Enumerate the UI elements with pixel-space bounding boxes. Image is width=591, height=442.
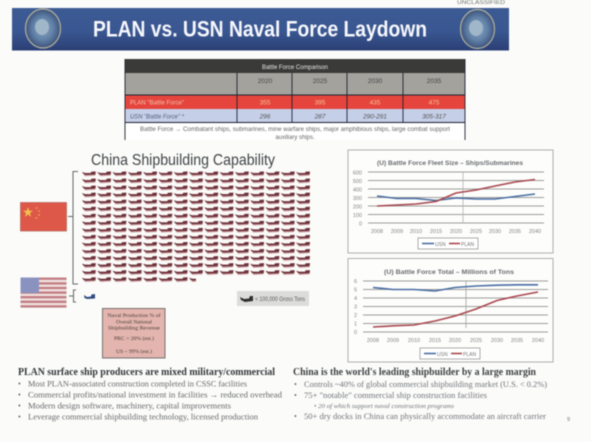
chart: battle force total tons: 2010 (408, 338, 420, 344)
text block: China leading shipbuilder: 75+ "notable" commercial ship construction facilities (304, 391, 487, 400)
chart: battle force fleet size: 500 (353, 179, 362, 185)
chart: battle force fleet size: 2035 (509, 229, 521, 235)
chart: battle force fleet size: 2025 (470, 229, 482, 235)
chart: battle force total tons: 6 (354, 279, 357, 285)
table row: USN: 290-291 (362, 114, 387, 120)
bracket: China ships (68, 172, 78, 284)
chart: battle force fleet size: 2020 (450, 229, 462, 235)
table row: USN (125, 109, 465, 122)
text block: China leading shipbuilder: • 20 of which support naval construction programs (314, 403, 454, 410)
line: USN tons (373, 285, 538, 291)
icon: left seal (26, 9, 60, 48)
table row: PLAN: 355 (260, 100, 271, 106)
table row: PLAN: PLAN "Battle Force" (130, 100, 184, 106)
table row: PLAN (125, 95, 465, 109)
table years row: 2025 (313, 78, 328, 85)
text block: PLAN producers: • (18, 380, 21, 388)
callout: naval production share: PRC = 20% (est.) (114, 335, 154, 342)
chart: battle force fleet size: 2009 (391, 229, 403, 235)
text block: China leading shipbuilder (293, 367, 547, 421)
table footnote (140, 127, 450, 141)
table: battle force comparison (125, 59, 465, 141)
text block: China leading shipbuilder: 50+ dry docks in China can physically accommodate an aircraft carrier (304, 412, 546, 421)
table years row: 2030 (368, 78, 383, 85)
callout: naval production share: Naval Production % of (108, 312, 161, 319)
text block: PLAN producers: Commercial profits/national investment in facilities → reduced overhead (28, 390, 282, 400)
line: USN ships (377, 194, 535, 200)
chart: battle force total tons: 2040 (532, 338, 544, 344)
chart: battle force fleet size: 2010 (410, 229, 422, 235)
line: PLAN tons (373, 292, 538, 327)
table row: USN: 287 (314, 114, 326, 120)
legend: ship tonnage: = 100,000 Gross Tons (255, 297, 305, 303)
table row: PLAN: 475 (429, 100, 440, 106)
flag: China (20, 202, 66, 231)
chart: battle force fleet size: 200 (353, 204, 362, 210)
chart legend: PLAN (461, 242, 474, 248)
table row: PLAN: 435 (370, 100, 381, 106)
chart: battle force total tons: 2009 (387, 338, 399, 344)
chart: battle force total tons: 5 (354, 288, 357, 294)
icon: US ship (84, 294, 95, 299)
chart: battle force total tons: 2015 (429, 338, 441, 344)
table footnote: Battle Force → Combatant ships, submarines, mine warfare ships, major amphibious ships, large combat support (140, 127, 450, 133)
chart title: (U) Battle Force Total – Millions of Tons (384, 269, 515, 276)
chart: battle force fleet size: 100 (353, 213, 362, 219)
bracket: US ships (69, 290, 76, 302)
chart: battle force total tons: 4 (354, 296, 357, 302)
table footnote: auxiliary ships. (275, 135, 315, 141)
classification marking: UNCLASSIFIED (457, 0, 505, 6)
heading: China Shipbuilding Capability: China Shipbuilding Capability (91, 152, 275, 169)
text block: PLAN producers: Most PLAN-associated construction completed in CSSC facilities (28, 380, 247, 388)
table years row (125, 73, 465, 95)
chart legend: USN (435, 242, 446, 248)
heading: PLAN surface ship producers are mixed military/commercial (18, 367, 275, 378)
chart legend (418, 238, 478, 249)
title banner (12, 8, 509, 50)
callout: naval production share: Shipbuilding Revenue (108, 326, 161, 332)
chart: battle force total tons: 2008 (367, 338, 379, 344)
title: PLAN vs. USN Naval Force Laydown (93, 16, 427, 42)
text block: PLAN producers: • (18, 412, 21, 422)
pictogram: China ships grid (82, 171, 312, 284)
chart: battle force fleet size: 2030 (489, 229, 501, 235)
chart legend: PLAN (463, 352, 476, 358)
text block: China leading shipbuilder: • (294, 412, 297, 421)
text block: China leading shipbuilder: • (294, 391, 297, 400)
heading: China is the world's leading shipbuilder by a large margin (293, 367, 536, 378)
table header (125, 59, 465, 73)
icon: right seal (460, 10, 494, 48)
page number: 9 (567, 417, 570, 423)
table row: USN: USN "Battle Force" * (130, 114, 185, 120)
table row: USN: 296 (259, 114, 271, 120)
table row: USN: 305-317 (422, 114, 446, 120)
chart: battle force total tons: 0 (354, 330, 357, 336)
text block: PLAN producers: • (18, 402, 21, 410)
text block: China leading shipbuilder: • (294, 380, 297, 389)
chart: battle force fleet size: 300 (353, 196, 362, 202)
chart: battle force total tons: 2030 (491, 338, 503, 344)
table years row: 2035 (427, 78, 442, 85)
text block: PLAN producers: • (18, 390, 21, 400)
table header: Battle Force Comparison (262, 64, 328, 71)
chart: battle force fleet size: 2040 (529, 229, 541, 235)
text block: China leading shipbuilder: Controls ~40% of global commercial shipbuilding market (U.S. < 0.2%) (304, 380, 547, 389)
flag: United States (20, 278, 66, 308)
callout: naval production share: US ~ 99% (est.) (116, 348, 152, 355)
chart: battle force fleet size: 2008 (371, 229, 383, 235)
chart: battle force total tons: 3 (354, 304, 357, 310)
chart: battle force total tons: 2020 (449, 338, 461, 344)
text block: PLAN producers (18, 367, 282, 422)
chart: battle force total tons: 2025 (470, 338, 482, 344)
text block: PLAN producers: Modern design software, machinery, capital improvements (28, 402, 231, 410)
chart: battle force fleet size: 600 (353, 170, 362, 176)
chart: battle force fleet size (348, 150, 553, 253)
chart: battle force total tons: 2035 (511, 338, 523, 344)
line: PLAN ships (377, 180, 535, 206)
chart: battle force fleet size: 400 (353, 188, 362, 194)
legend: ship tonnage (237, 291, 309, 306)
table years row: 2020 (258, 78, 273, 85)
chart: battle force fleet size: 0 (359, 222, 362, 228)
table row: PLAN: 395 (315, 100, 326, 106)
chart: battle force total tons: 2 (354, 313, 357, 319)
chart title: (U) Battle Force Fleet Size – Ships/Submarines (377, 160, 524, 167)
chart: battle force total tons (348, 258, 553, 362)
chart: battle force total tons: 1 (354, 322, 357, 328)
text block: PLAN producers: Leverage commercial shipbuilding technology, licensed production (28, 412, 258, 422)
chart: battle force fleet size: 2015 (430, 229, 442, 235)
chart legend (420, 348, 480, 359)
chart legend: USN (437, 352, 448, 358)
callout: naval production share: Overall National (116, 320, 152, 326)
callout: naval production share (102, 308, 165, 358)
